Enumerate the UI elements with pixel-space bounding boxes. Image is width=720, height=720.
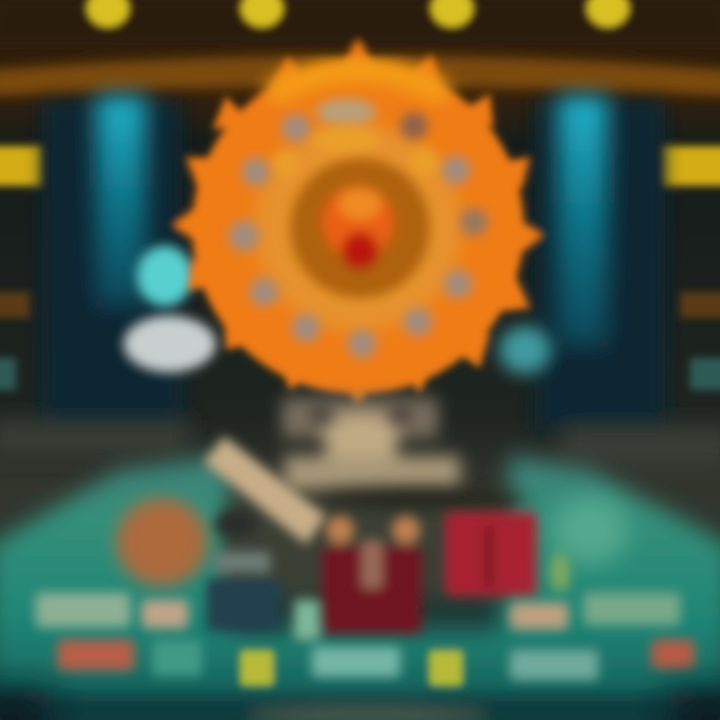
right table highlight (552, 496, 628, 564)
inner ring (254, 124, 462, 332)
table center area (225, 488, 528, 595)
number ring spots (229, 99, 488, 358)
roulette wheel (172, 38, 544, 406)
green table (0, 455, 720, 720)
red cup center (322, 516, 422, 634)
wheel hub (322, 186, 394, 268)
left cyan glow and white cloud (124, 246, 216, 372)
corner vignette (0, 690, 720, 720)
tan chip stack (116, 498, 208, 586)
red cup right (445, 512, 537, 596)
side wall lights (0, 146, 720, 390)
left dark column (42, 100, 182, 430)
yellow table markers (240, 650, 463, 686)
stand dark sockets (309, 406, 413, 424)
left teal light column (96, 96, 146, 306)
diagonal cream plank (204, 436, 326, 544)
yellow inner segments (273, 127, 438, 177)
table labels (36, 593, 694, 680)
bottom table edge (0, 696, 720, 720)
wheel body with teeth (172, 38, 544, 406)
right cyan glow (499, 326, 551, 374)
wheel stand (282, 398, 460, 490)
brown inner disc (290, 158, 430, 298)
side floor shadows (0, 420, 720, 470)
upper rim highlight (270, 70, 446, 96)
ceiling lights (86, 0, 630, 28)
right dark column (535, 100, 665, 430)
ceiling band (0, 0, 720, 96)
dark blue chip stack (206, 510, 280, 632)
olive accent (550, 552, 570, 592)
right teal light column (558, 96, 608, 346)
